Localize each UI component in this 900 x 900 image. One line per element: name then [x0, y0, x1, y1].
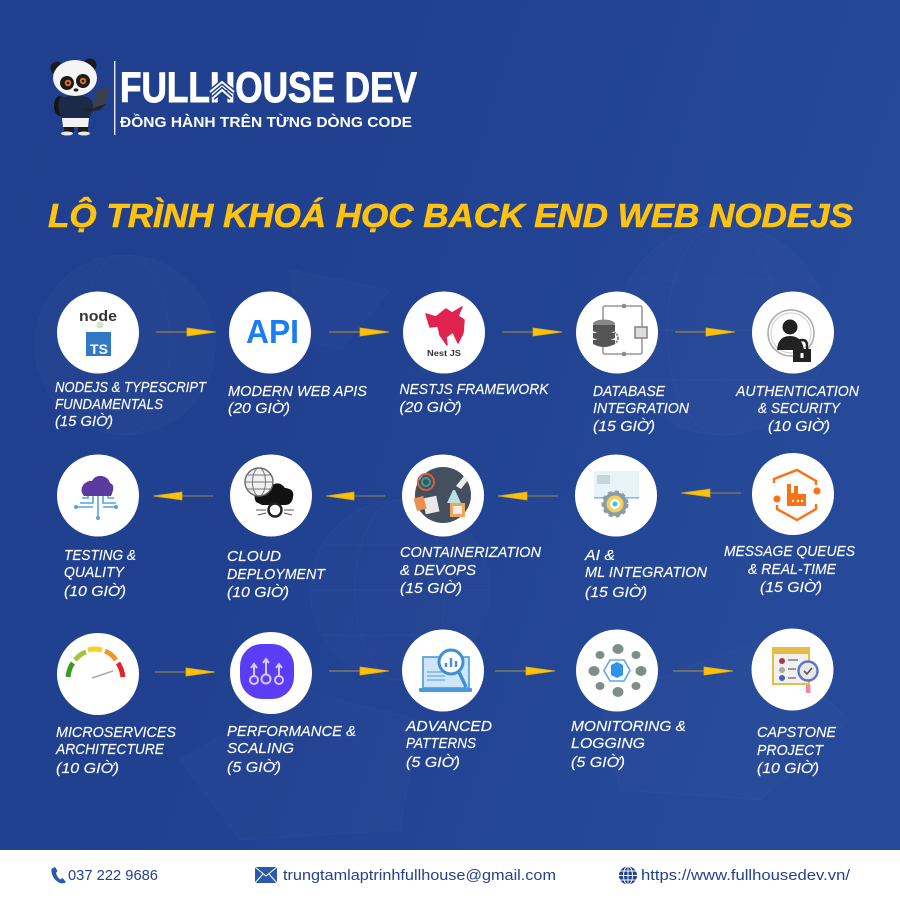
logo divider: [114, 61, 115, 135]
label: TESTING &: [64, 547, 136, 564]
label: INTEGRATION: [593, 400, 689, 417]
label: MESSAGE QUEUES: [724, 543, 855, 560]
logo: [50, 58, 417, 136]
phone number: 037 222 9686: [68, 867, 158, 884]
step: Modern Web APIs: [228, 292, 367, 417]
label: NODEJS & TYPESCRIPT: [55, 379, 208, 396]
title: LỘ TRÌNH KHOÁ HỌC BACK END WEB NODEJS: [48, 196, 853, 234]
label: (5 GIỜ): [406, 754, 460, 771]
icon: checklist review: [773, 648, 818, 693]
label: (15 GIỜ): [400, 580, 462, 597]
arrow: [329, 328, 389, 336]
label: DEPLOYMENT: [227, 566, 327, 583]
label: (5 GIỜ): [571, 754, 625, 771]
website: https://www.fullhousedev.vn/: [641, 867, 851, 884]
footer: [0, 850, 900, 900]
icon: scaling arrows: [240, 644, 294, 699]
step: Advanced Patterns: [402, 630, 492, 771]
icon: AI gear: [594, 471, 639, 516]
label: LOGGING: [571, 735, 645, 752]
icon: API: API: [246, 313, 299, 350]
label: CONTAINERIZATION: [400, 544, 541, 561]
step: Microservices Architecture: [55, 633, 176, 777]
icon: devops collage: [414, 467, 471, 523]
icon: database: [593, 304, 647, 356]
label: (15 GIỜ): [593, 418, 655, 435]
icon: cloud network: [74, 476, 118, 520]
step: NestJS Framework: [400, 292, 549, 416]
label: SCALING: [227, 740, 294, 757]
label: MONITORING &: [571, 718, 686, 735]
arrow: [155, 668, 215, 676]
step: AI and ML Integration: [575, 454, 707, 601]
step: Monitoring and Logging: [571, 630, 686, 771]
label: MODERN WEB APIS: [228, 383, 367, 400]
step: Message Queues and Real-time: [724, 453, 855, 596]
logo wordmark: FULLHOUSE DEV: [120, 64, 417, 112]
email: trungtamlaptrinhfullhouse@gmail.com: [283, 867, 556, 884]
logo house mark: [210, 82, 234, 98]
step: NodeJS and TypeScript: [55, 292, 208, 430]
label: ARCHITECTURE: [55, 741, 165, 758]
arrow: [153, 492, 213, 500]
logo tagline: ĐỒNG HÀNH TRÊN TỪNG DÒNG CODE: [120, 113, 412, 131]
step: Cloud Deployment: [227, 454, 327, 601]
step: Authentication and Security: [735, 292, 859, 435]
icon: node and ts: TS: [90, 341, 108, 357]
label: CAPSTONE: [757, 724, 837, 741]
arrow: [675, 328, 735, 336]
icon: user lock: [768, 310, 814, 362]
label: NESTJS FRAMEWORK: [400, 381, 549, 398]
arrow: [681, 489, 741, 497]
label: (15 GIỜ): [55, 413, 113, 430]
label: (20 GIỜ): [228, 400, 290, 417]
label: MICROSERVICES: [56, 724, 176, 741]
icon: globe: [619, 866, 637, 884]
icon: phone: [51, 867, 66, 883]
icon: gauge: [68, 649, 123, 678]
label: ML INTEGRATION: [585, 564, 707, 581]
label: PROJECT: [757, 742, 825, 759]
step: Containerization and DevOps: [400, 454, 541, 597]
arrow: [498, 492, 558, 500]
label: (20 GIỜ): [400, 399, 462, 416]
label: CLOUD: [227, 548, 281, 565]
icon: cloud globe: [245, 468, 294, 516]
label: (10 GIỜ): [64, 583, 126, 600]
icon: message queue: [773, 470, 821, 520]
label: (10 GIỜ): [757, 760, 819, 777]
label: & SECURITY: [758, 400, 841, 417]
arrow: [156, 328, 216, 336]
label: DATABASE: [593, 383, 666, 400]
label: AI &: [584, 547, 615, 564]
step: Performance and Scaling: [227, 632, 356, 776]
arrow: [329, 667, 389, 675]
label: & REAL-TIME: [748, 561, 837, 578]
label: (15 GIỜ): [585, 584, 647, 601]
label: (15 GIỜ): [760, 579, 822, 596]
icon: NestJS: [426, 307, 464, 358]
label: PATTERNS: [406, 735, 476, 752]
background watermark globes: [35, 225, 850, 840]
arrow: [502, 328, 562, 336]
icon: node network: [588, 644, 646, 697]
label: QUALITY: [64, 564, 125, 581]
arrow: [673, 667, 733, 675]
label: (10 GIỜ): [56, 760, 119, 777]
icon: envelope: [255, 867, 277, 883]
icon: node and ts: [79, 308, 117, 357]
label: PERFORMANCE &: [227, 723, 356, 740]
icon: node and ts: node: [79, 308, 117, 325]
label: (10 GIỜ): [768, 418, 830, 435]
icon: NestJS: Nest JS: [427, 349, 462, 358]
label: ADVANCED: [405, 718, 492, 735]
step: Capstone Project: [752, 628, 837, 777]
label: AUTHENTICATION: [735, 383, 859, 400]
icon: panda mascot: [50, 58, 109, 136]
label: (10 GIỜ): [227, 584, 289, 601]
label: & DEVOPS: [400, 562, 476, 579]
step: Database Integration: [576, 292, 689, 435]
icon: analysis laptop: [419, 650, 472, 692]
label: (5 GIỜ): [227, 759, 281, 776]
step: Testing and Quality: [57, 454, 139, 600]
arrow: [495, 667, 555, 675]
arrow: [326, 492, 385, 500]
label: FUNDAMENTALS: [55, 396, 163, 413]
